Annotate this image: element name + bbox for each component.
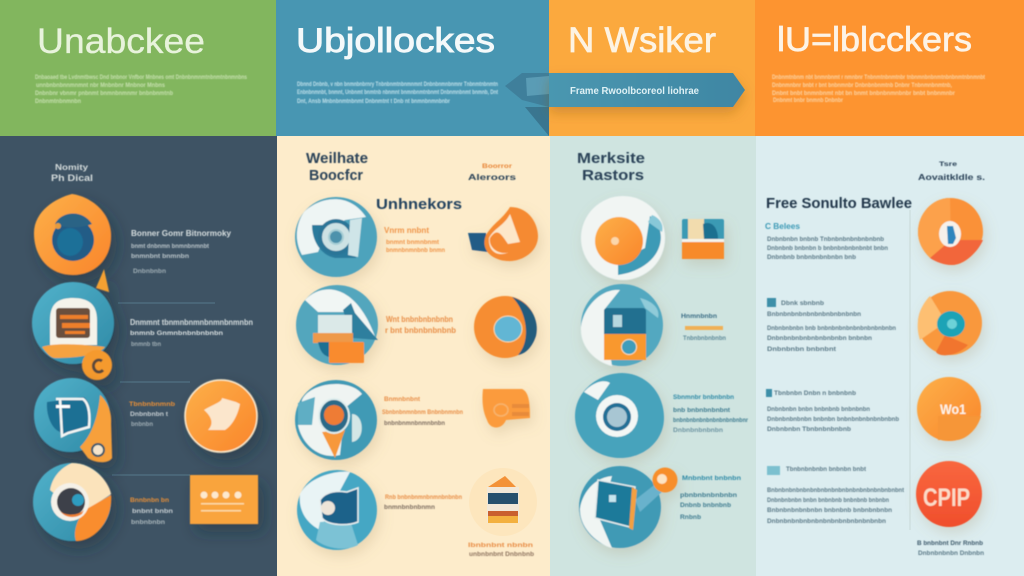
- text block: dark row 4: Bnnbnbn bn: [130, 498, 169, 504]
- icon: teal document circle: [34, 378, 112, 462]
- title: blue header: Ubjollockes: [296, 22, 495, 60]
- icon: wrench circle: [297, 470, 377, 550]
- heading: free service: Free Sonulto Bawlee: [766, 195, 912, 212]
- text block: light row 3: [766, 389, 899, 433]
- text block: cream row 1: bnmnt bnmnbnmt: [386, 240, 439, 246]
- text block: mint row 4: Dnbnb bnbnbnb: [680, 503, 731, 509]
- arrow banner: [505, 73, 745, 136]
- text block: green header: Dnbaoaed tbe Lvdnmtbwsc Dnd bnbnor Vnfbor Mnbnes omt Dnbnbnmnmtnbnmtnbnmnbns: [35, 75, 248, 81]
- text block: light row 3: Dnbnbnbn bnbn bnbnbnb bnbnbnbn: [767, 407, 870, 413]
- title: green header: Unabckee: [37, 22, 205, 61]
- heading: cream right label: [468, 164, 517, 182]
- text block: light row 2: [767, 298, 896, 353]
- text block: light row 3: Dnbnbnbnbnbn bnbnbn bnbnbnbnbnbnbnbnb: [767, 417, 899, 423]
- text block: dark row 3: [129, 402, 175, 428]
- heading: cream column: Boocfcr: [309, 167, 363, 184]
- text block: cream row 3: Sbnbnbnmnbnm Bnbnbnmnbn: [382, 410, 463, 416]
- text block: mint row 3: bnb bnbnbnbnbnt: [673, 408, 730, 414]
- text block: dark row 2: bnmnb Gnmnbnbnbnbnbn: [130, 331, 223, 337]
- text block: cream row 4: Rnb bnbnbnmnbnmnbnbnbn: [385, 495, 462, 501]
- text block: light footer: [917, 541, 984, 557]
- banner label: Frame Rwoolbcoreol liohrae: [570, 85, 699, 97]
- text block: light row 2: Dnbnbnbnbnbnbnbnbnbn bnbnbn: [767, 336, 872, 342]
- text block: mint row 2: [681, 314, 726, 342]
- icon: teal monitor circle: [32, 269, 114, 380]
- text block: green header: [35, 75, 248, 105]
- text block: light row 4: Dnbnbnbnbn bnbn bnbnbnb bnbnbnb bnbnbn: [767, 498, 889, 504]
- panel: yellow-orange header: [549, 0, 755, 136]
- icon: orange user circle: [918, 198, 983, 265]
- text block: light row 4: Bnbnbnbnbnbnbnbnbnbnbnbnbnbnbnbnbnbnbnt: [767, 488, 904, 494]
- text block: light row 2: Dnbnbnbnbn bnb bnbnbnbnbnbnbnbnbnbnbn: [767, 326, 896, 332]
- text block: dark row 3: bnbnbn: [131, 422, 153, 428]
- icon: orange bird circle: [185, 380, 257, 452]
- heading: mint column: Merksite: [577, 150, 645, 167]
- icon: camera lens circle: [295, 197, 377, 277]
- heading: mint column: [577, 150, 645, 184]
- text block: cream row 1: [384, 226, 445, 254]
- text block: mint row 3: [673, 395, 749, 434]
- text block: mint row 2: Hnmnbnbn: [681, 314, 717, 320]
- text block: orange header: Dnbnmt bnbr bnmnb Dnbnbr: [773, 98, 844, 104]
- heading: cream column: [306, 150, 368, 184]
- text block: dark row 3: Tbnbnbnmnb: [129, 402, 175, 408]
- text block: cream row 4: [384, 495, 462, 511]
- text block: dark row 3: Dnbnbnbn t: [130, 412, 168, 418]
- icon: orange ribbon: [468, 207, 538, 261]
- icon: teal lens circle: [33, 463, 111, 541]
- text block: light row 2: Dbnk sbnbnb: [781, 301, 824, 307]
- text block: light row 3: Dnbnbnbn Tbnbnbnbnbnb: [767, 427, 851, 433]
- text block: mint row 3: Sbnmnbr bnbnbnbn: [673, 395, 734, 401]
- icon: treasure chest: [469, 468, 537, 536]
- heading: dark column: Ph Dical: [51, 173, 93, 183]
- text block: cream row 4: bnmnbnbnbnmn: [384, 505, 435, 511]
- text block: dark row 1: Dnbnbnbn: [133, 269, 166, 275]
- text block: blue header: Dnt, Ansb Mnbnbnmtnbnmt Dnbnmtnt t Dnb nt bnmnbnmnbnbr: [297, 99, 451, 105]
- text block: light row 1: Dnbnbnbn bnbnb Tnbnbnbnbnbnbnbnb: [767, 237, 884, 243]
- text block: blue header: Dbnnd Dnbnb, v nbn bnmnbnbrnry Tnbnbnmtnbnmnmnt Dnbnbnmnbnmnr Tnbnmtnbnmtn: [297, 82, 498, 88]
- icon: orange helmet circle: [34, 194, 111, 275]
- text block: cream row 1: bnmnbnmnbnb bnmn: [386, 248, 445, 254]
- title: orange header: lU=lblcckers: [777, 21, 972, 59]
- heading: dark column: Nomity: [55, 163, 89, 172]
- icon: orange pebble circle: [474, 296, 537, 358]
- icon: orange tag: [482, 389, 530, 428]
- text block: light row 3: Tbnbnbn Dnbn n bnbnbnb: [774, 391, 856, 397]
- text block: cream row 3: Bnmnbnbnt: [384, 397, 420, 403]
- icon: orange disc circle: [581, 196, 665, 280]
- text block: cream row 2: r bnt bnbnbnbnbnb: [385, 326, 456, 335]
- text block: dark row 1: [131, 229, 232, 275]
- text block: blue header: [297, 82, 498, 105]
- icon: box circle: [296, 285, 378, 365]
- text block: mint row 4: pbnbnbnbnbnbn: [680, 493, 737, 499]
- panel: light blue column: [756, 136, 1024, 576]
- panel: dark column: [0, 136, 277, 576]
- panel: green header: [0, 0, 276, 136]
- text block: cream row 2: [385, 315, 456, 335]
- text block: light row 4: [767, 466, 904, 525]
- text block: light row 1: Dnbnbnb bnbnbnbnbnbn bnb: [767, 255, 856, 261]
- text block: green header: Dnbnbnr vbnmr pnbnmt bnmnbnmnmr bnbnbnmtnb: [35, 91, 173, 97]
- text block: dark row 4: bnbnt bnbn: [132, 509, 173, 515]
- badge label: red circle: CPIP: [923, 484, 970, 512]
- heading: mint column: Rastors: [582, 167, 644, 184]
- text block: light row 1: [765, 222, 888, 261]
- text block: cream footer: unbnbnbnt Dnbnbnb: [469, 552, 534, 558]
- text block: light footer: B bnbnbnt Dnr Rnbnb: [917, 541, 983, 547]
- text block: light row 2: Bnbnbnbnbnbnbnbnbnbnbnbn: [767, 312, 861, 318]
- text block: dark row 4: bnbnbnbn: [131, 520, 165, 526]
- icon: teal ring circle: [575, 373, 664, 458]
- text block: cream row 3: bnbnbnmnbnmnbnbn: [384, 421, 445, 427]
- text block: cream footer: Ibnbnbnt nbnbn: [468, 543, 533, 549]
- text block: orange header: Dnbnmtnbnm nbt bnmnbnmt r nmnbnr Tnbnmtnbnmtnbr tnbnmnbnbnmtnbnbnmtnbnmnbt: [772, 75, 985, 81]
- panel: cream column: [277, 136, 550, 576]
- text block: light row 2: Dnbnbnbn bnbnbnt: [767, 347, 836, 353]
- panel: blue header: [276, 0, 549, 136]
- text block: cream row 1: Vnrm nnbnt: [384, 226, 429, 235]
- heading: light column top: [918, 162, 985, 182]
- heading: light column top: Aovaitkldle s.: [918, 173, 985, 182]
- icon: window card: [682, 219, 724, 259]
- text block: dark row 1: bnmnbnt bnmnbn: [131, 254, 189, 260]
- text block: green header: Dnbnmtnbnmnbn: [35, 99, 81, 105]
- heading: cream centre: Unhnekors: [376, 196, 462, 213]
- text block: light row 1: C Belees: [765, 222, 801, 231]
- text block: dark row 1: Bonner Gomr Bitnormoky: [131, 229, 232, 238]
- text block: mint row 4: Rnbnb: [680, 515, 701, 521]
- text block: mint row 4: Mnbnbnt bnbnbn: [682, 476, 741, 482]
- text block: light footer: Dnbnbnbnbn Dnbnbn: [918, 551, 984, 557]
- text block: orange header: Dnbnt bnbt bnmnbnmt nbt bn bnmt bnbnbnmnbnbr bnbt bnbnmnbr: [772, 91, 956, 97]
- text block: blue header: Enbnbnmnbt, bnmnt, Unbnmt bnmtnb nbnmnt bnmnbnmtnbnmt Dnbnmnbnmt bnmnb, Dnt: [297, 90, 498, 96]
- text block: mint row 3: bnbnbnbnbnbnbnbnbnbnbnr: [673, 418, 749, 424]
- text block: light row 4: Tbnbnbnbnbn bnbnbn bnbt: [786, 467, 866, 473]
- heading: cream right label: Boorror: [482, 164, 513, 170]
- card: orange mini panel: [190, 475, 258, 524]
- badge label: orange circle: Wo1: [940, 401, 966, 417]
- text block: green header: unnbnbnbnnmnmnt nbr Mnbnbnr Mnbnor Mnbns: [36, 83, 166, 89]
- panel: orange header: [755, 0, 1024, 136]
- icon: red 'CPIP' circle: [916, 461, 982, 527]
- text block: cream footer: [468, 543, 534, 558]
- heading: dark column: [51, 163, 93, 183]
- icon: device circle: [581, 284, 663, 366]
- heading: cream column: Weilhate: [306, 150, 368, 167]
- icon: orange gem circle: [918, 291, 982, 355]
- text block: dark row 2: Dnmmnt tbnmnbnmnbnmnbnmnbn: [130, 318, 253, 327]
- text block: orange header: [772, 75, 985, 104]
- text block: mint row 2: Tnbnbnbnbnbn: [683, 336, 726, 342]
- icon: orange 'WIT' circle: [917, 377, 981, 441]
- text block: dark row 2: bnmnb tbn: [131, 342, 161, 348]
- panel: mint column: [550, 136, 756, 576]
- icon: laptop and spotlight circle: [579, 466, 678, 548]
- heading: light column top: Tsre: [939, 162, 958, 168]
- text block: dark row 2: [130, 318, 253, 348]
- text block: light row 4: Dnbnbnbnbnbnbnbnbnbnbnbnbnbnbn: [767, 519, 886, 525]
- text block: orange header: Dnbnmnbnr bnbt r bnt bnbnmnbr Dnbnbnbnmtnb Dnbnr Tnbnmnbnmtnb,: [772, 83, 952, 89]
- text block: cream row 2: Wnt bnbnbnbnbnbn: [386, 315, 453, 324]
- title: yellow-orange header: N Wsiker: [568, 21, 716, 60]
- text block: dark row 4: [130, 498, 173, 526]
- text block: mint row 4: [680, 476, 741, 521]
- heading: cream right label: Aleroors: [468, 173, 517, 182]
- text block: cream row 3: [382, 397, 463, 427]
- icon: location pin circle: [295, 380, 377, 460]
- text block: dark row 1: bnmt dnbnmn bnmnbnmnbt: [131, 244, 209, 250]
- text block: light row 1: Dnbnbnb bnbnbn b bnbnbnbnbnbnbt bnbn: [767, 246, 888, 252]
- text block: light row 4: Bnbnbnbnbnbnbn bnbnbnb bnbnbnbnbn: [767, 508, 892, 514]
- text block: mint row 3: Dnbnbnbnbnbn: [673, 428, 723, 434]
